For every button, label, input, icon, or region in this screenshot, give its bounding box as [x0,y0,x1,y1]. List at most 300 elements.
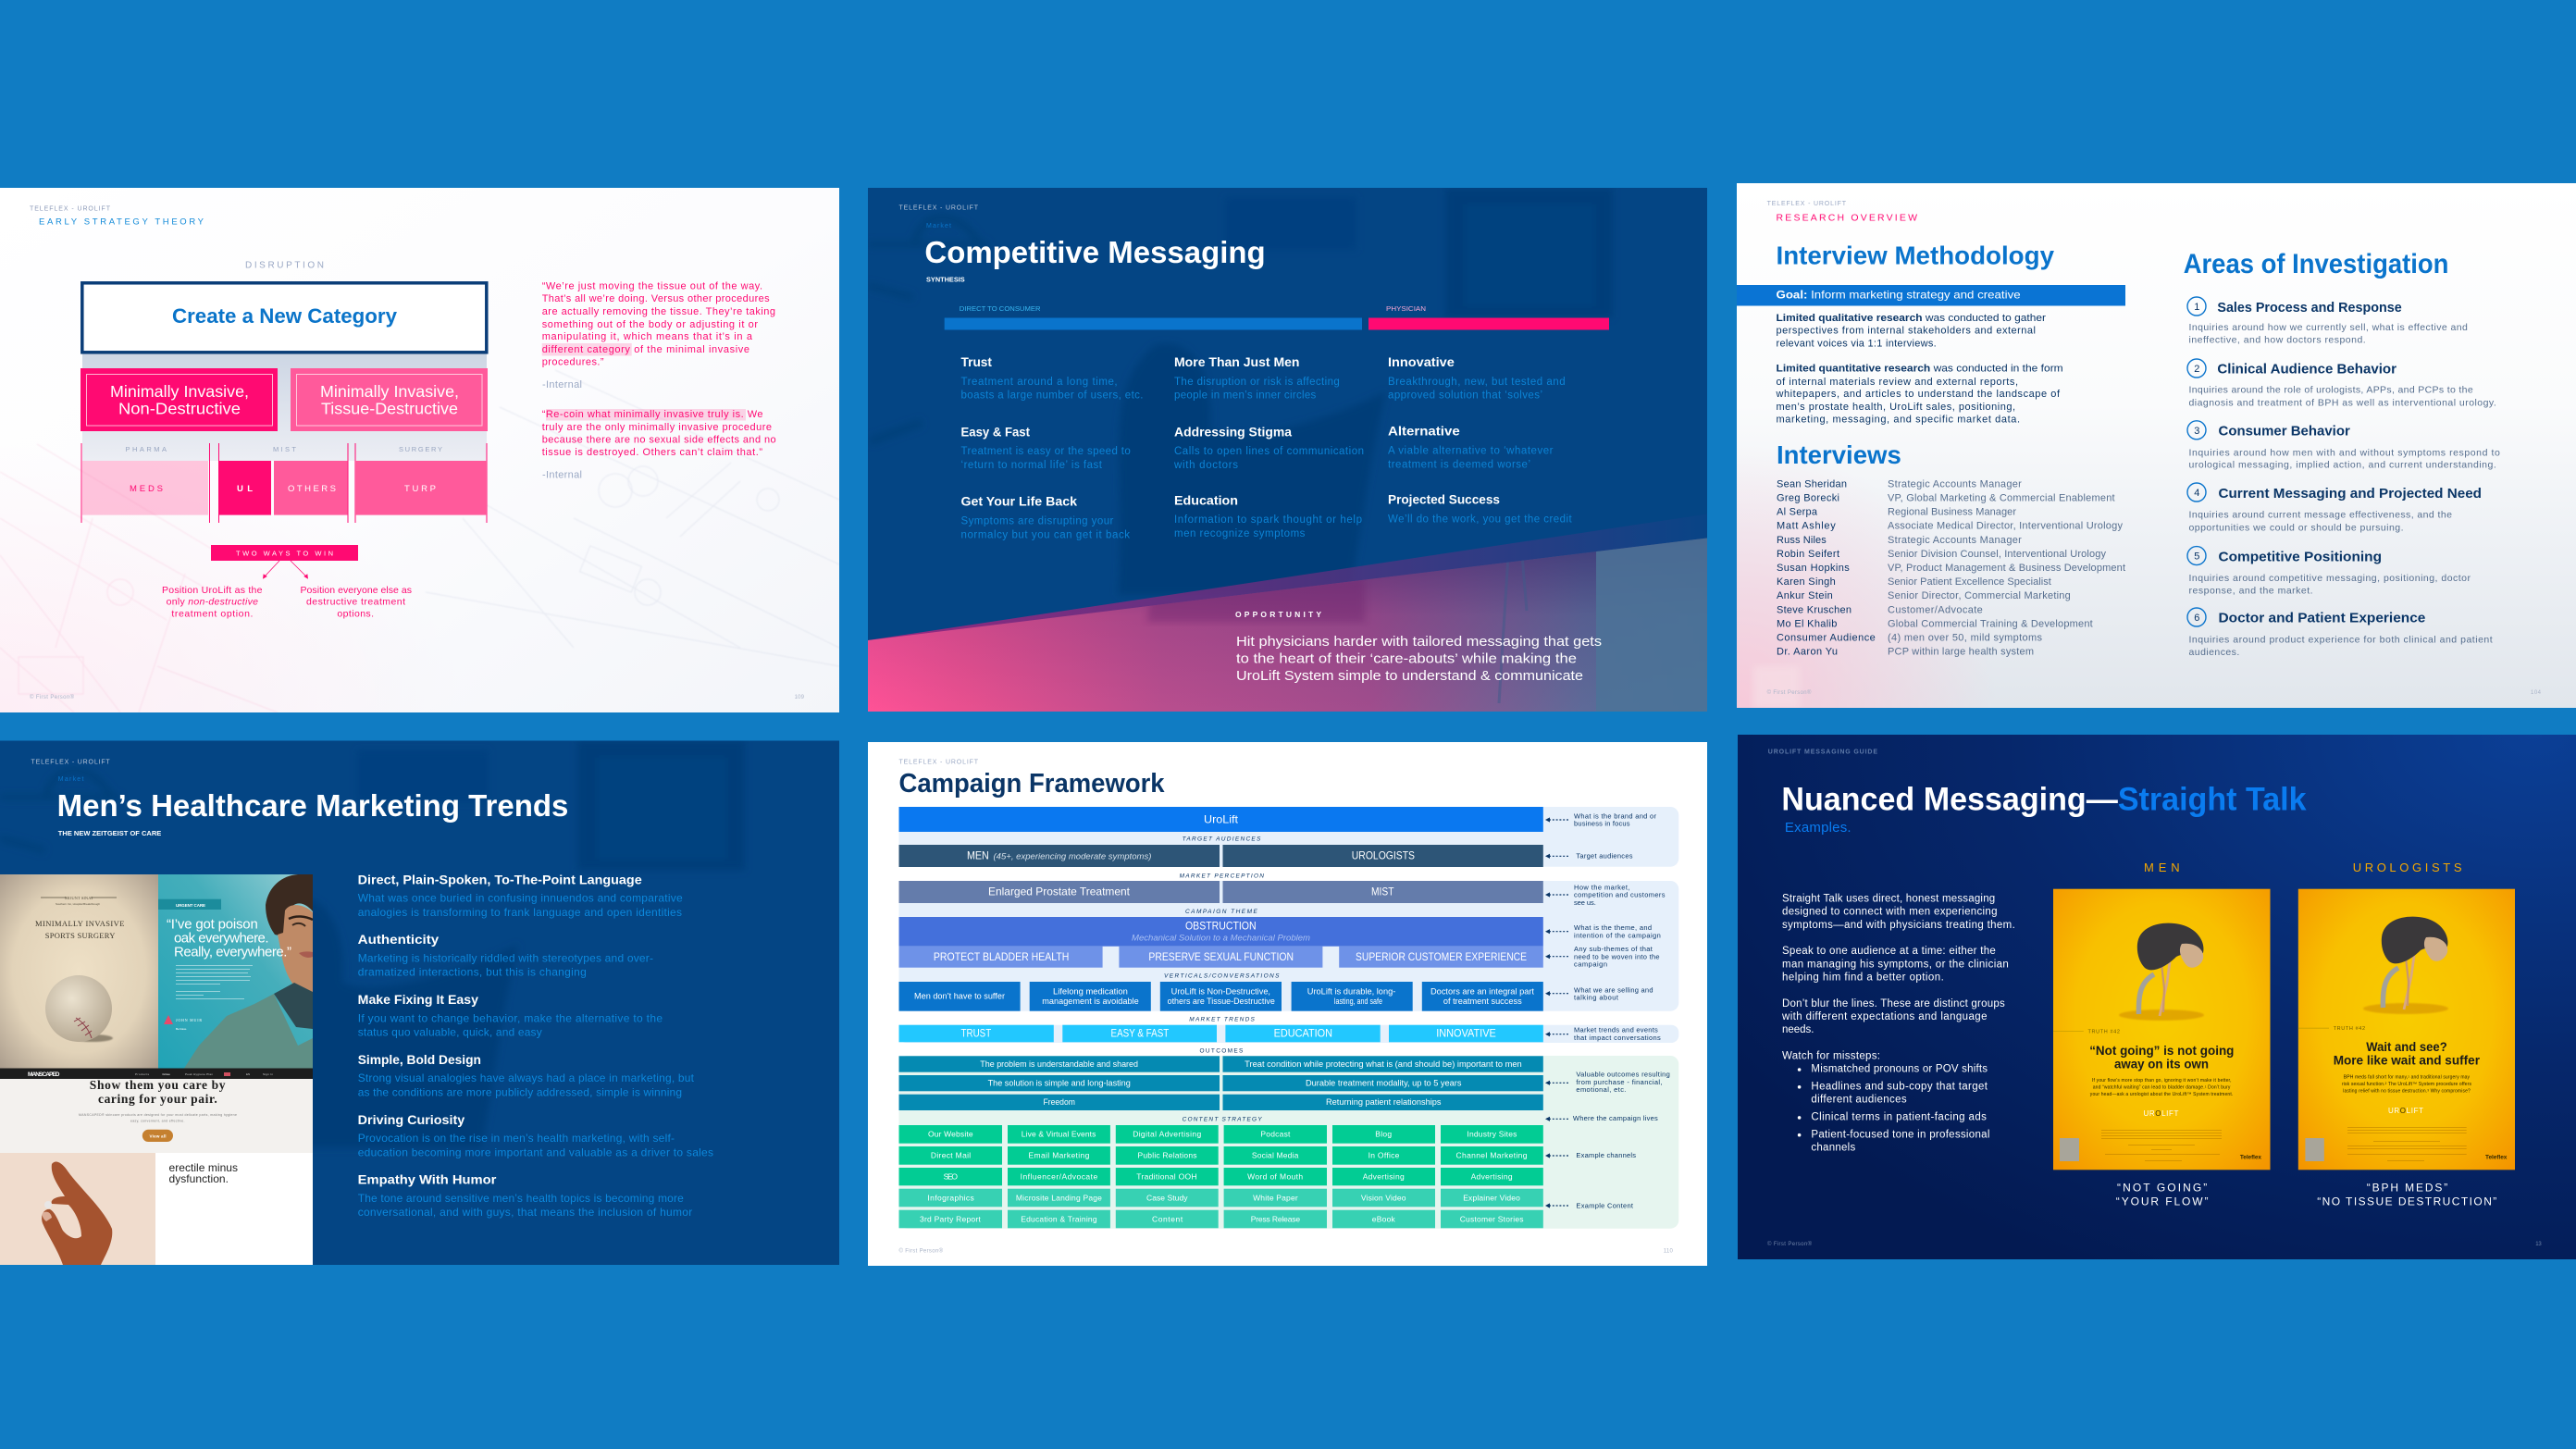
page number: 109 [795,695,805,700]
grid: example channels: Blog [1375,1130,1392,1139]
quote 1: different category of the minimal invasive [542,344,749,355]
column header: physician: PHYSICIAN [1386,304,1426,313]
item 3: urological messaging, implied action, and current understanding. [2189,460,2496,471]
list: missteps: Headlines and sub-copy that target [1811,1081,1988,1092]
background group: outcomes and content [899,1056,1678,1229]
ad: minimally invasive sports surgery [0,874,158,1068]
callout: opportunity [1235,610,1602,684]
item 5: Inquiries around competitive messaging, positioning, doctor [2189,573,2471,584]
row: obstruction theme: Mechanical Solution to a Mechanical Problem [1132,934,1310,944]
message: education: Information to spark thought or help [1174,514,1362,526]
grid: outcomes [899,1056,1543,1110]
annotation: brand in focus: What is the brand and or [1574,811,1656,820]
header: client: TELEFLEX - UROLIFT [1767,201,1847,207]
box: tissue-destructive [291,368,488,431]
message: trust: boasts a large number of users, etc. [960,390,1144,402]
list: missteps: different audiences [1811,1095,1907,1106]
caption: urologists [2317,1182,2496,1208]
row: market perception: MIST [1371,886,1394,898]
row: market perception: Enlarged Prostate Treatment [988,886,1131,898]
trend: direct language: What was once buried in confusing innuendos and comparative [358,892,683,905]
text: position urolift: Position UroLift as the [162,585,263,596]
row: audiences: UROLOGISTS [1352,849,1415,862]
grid: example content: Press Release [1251,1214,1300,1223]
poster: men [2053,889,2271,1170]
panel background [1738,735,2576,1259]
site: manscaped: Our Cause [162,1072,170,1076]
row: market trends: EDUCATION [1274,1027,1332,1040]
annotation: sub-themes [1545,945,1660,969]
item 4: Current Messaging and Projected Need [2219,486,2482,502]
text: introduction: man managing his symptoms, or the clinician [1782,959,2009,970]
poster: urologists: UROLIFT [2388,1107,2423,1115]
grid: example channels: Live & Virtual Events [1022,1130,1096,1139]
grid: example content: Microsite Landing Page [1016,1194,1102,1203]
item 2: 2 [2194,364,2199,375]
row: conversations: management is avoidable [1042,997,1139,1006]
item 4: opportunities we could or should be pursuing. [2189,522,2404,533]
table: interviewee roles: VP, Global Marketing & Commercial Enablement [1888,492,2115,503]
trend: empathy with humor: Empathy With Humor [358,1171,497,1186]
table: interviewee roles: Senior Patient Excellence Specialist [1888,576,2051,588]
ad: urgent care: Really, everywhere.” [174,944,291,960]
background group: market trends [899,1025,1678,1043]
grid: example channels: Advertising [1363,1172,1405,1182]
trend: driving curiosity: Driving Curiosity [358,1112,465,1127]
annotation: example content: Example Content [1576,1201,1634,1209]
label: market: Market [926,223,951,229]
header: section title: RESEARCH OVERVIEW [1777,213,1917,224]
row: urolift brand [899,807,1543,832]
diagram label: DISRUPTION [245,261,324,270]
text: quantitative research: Limited quantitative research was conducted in the form [1777,364,2063,375]
item 5: Competitive Positioning [2219,549,2382,564]
grid: example channels: Industry Sites [1467,1130,1517,1139]
panel: campaign framework [868,742,1707,1266]
item 2: diagnosis and treatment of BPH as well as interventional urology. [2189,397,2496,408]
message: more than just men: people in men’s inner circles [1174,390,1317,402]
header: guide: UROLIFT MESSAGING GUIDE [1768,749,1877,756]
column header: direct to consumer [945,304,1362,329]
site: manscaped: View all [150,1134,167,1138]
trend: make fixing it easy [358,992,663,1039]
annotation: market perception: see us. [1574,898,1596,907]
segment: meds [82,461,208,515]
poster: urologists: TRUTH #42 [2334,1026,2365,1032]
box: non-destructive [80,368,278,431]
ad: minimally invasive sports surgery: MOUNT SINAI [65,896,93,900]
message: projected success: Projected Success [1388,492,1500,506]
quote 2 [542,409,776,480]
footer: © First Person® [1767,689,1812,696]
footer: © First Person® [30,694,75,700]
grid: example channels: Direct Mail [931,1151,971,1160]
table: interviewee names: Karen Singh [1777,576,1836,588]
grid: outcomes: The problem is understandable and shared [980,1059,1138,1069]
title: Campaign Framework [899,769,1165,799]
trend: make fixing it easy: status quo valuable, quick, and easy [358,1026,542,1039]
goal bar: Goal: Inform marketing strategy and creative [1777,288,2021,301]
annotation: target audiences: Target audiences [1576,852,1633,861]
item 3: Consumer Behavior [2219,424,2350,439]
header: client: TELEFLEX - UROLIFT [899,205,979,212]
trend: authenticity: dramatized interactions, but this is changing [358,966,587,979]
item 4: Inquiries around current message effectiveness, and the [2189,510,2452,521]
poster: urologists: risk sexual function.² The UroLift™ System procedure offers [2342,1082,2472,1087]
message: innovative: approved solution that ‘solves’ [1388,390,1542,402]
panel background [0,188,839,712]
message: easy and fast: Easy & Fast [960,425,1030,439]
category labels: SURGERY [399,445,442,453]
list: missteps: channels [1811,1143,1855,1154]
poster: urologists: lasting relief with no tissue destruction.³ Why compromise? [2343,1088,2471,1094]
annotation: brand in focus: business in focus [1574,820,1630,828]
poster: urologists: More like wait and suffer [2334,1054,2481,1068]
table: interviewee names: Mo El Khalib [1777,618,1837,629]
message: easy and fast [960,425,1131,471]
annotation: theme: What is the theme, and [1574,923,1652,932]
header: client: TELEFLEX - UROLIFT [30,205,111,213]
row: conversations: Men don’t have to suffer [914,992,1005,1001]
grid: example content: Case Study [1146,1194,1188,1203]
annotation: outcomes: Valuable outcomes resulting [1576,1071,1670,1079]
row: market trends: INNOVATIVE [1436,1027,1496,1040]
message: easy and fast: ‘return to normal life’ is fast [960,460,1103,471]
annotation: selling [1545,985,1653,1001]
poster: men: TRUTH #42 [2087,1029,2120,1034]
grid: example content: eBook [1372,1214,1396,1223]
quote 1: something out of the body or adjusting it or [542,319,758,330]
poster: urologists: Wait and see? [2366,1040,2447,1054]
grid: example content: Content [1152,1214,1183,1223]
item 2 [2187,359,2496,408]
poster: urologists [2298,889,2515,1170]
text: quantitative research: marketing, messaging, and specific market data. [1777,415,2020,426]
annotation: sub-themes: need to be woven into the [1574,952,1660,960]
heading: interviews: Interviews [1777,440,1901,469]
text: introduction: Watch for missteps: [1782,1050,1880,1061]
message: projected success [1388,492,1572,525]
category labels [126,447,442,452]
site: manscaped: EN [246,1072,250,1076]
trend: authenticity: Authenticity [358,932,439,947]
table: interviewee roles: Global Commercial Training & Development [1888,618,2093,629]
poster: men: “Not going” is not going [2089,1044,2234,1058]
panel background [868,188,1707,712]
text: introduction: needs. [1782,1024,1814,1035]
grid: outcomes: The solution is simple and long-lasting [988,1079,1131,1088]
row: sub-themes: SUPERIOR CUSTOMER EXPERIENCE [1356,950,1527,963]
text: position urolift: treatment option. [171,609,253,620]
trend: direct language: analogies is transforming to frank language and open identities [358,906,682,919]
diagram: disruption [80,261,488,523]
message: alternative: Alternative [1388,424,1460,439]
grid: example channels: Word of Mouth [1247,1172,1303,1182]
annotation: market trends: that impact conversations [1574,1034,1661,1042]
annotation: example channels [1545,1151,1636,1159]
table: interviewee roles: Senior Director, Commercial Marketing [1888,590,2071,601]
message: more than just men: More Than Just Men [1174,355,1299,369]
quote 2: “Re-coin what minimally invasive truly is. We [542,409,762,420]
row: audiences: (45+, experiencing moderate symptoms) [994,852,1151,861]
header: section title: EARLY STRATEGY THEORY [39,217,204,227]
trend: simple bold design: as the conditions are more publicly addressed, simple is winning [358,1085,682,1098]
poster: men: Teleflex [2240,1155,2261,1161]
item 6: 6 [2194,613,2199,624]
text: quantitative research: whitepapers, and articles to understand the landscape of [1775,389,2061,400]
grid: example channels [899,1125,1543,1185]
message: get your life back: Symptoms are disrupting your [960,516,1114,527]
caption: urologists: “BPH MEDS” [2367,1182,2447,1195]
grid: example channels: Podcast [1260,1130,1291,1139]
table: interviewee roles: Strategic Accounts Manager [1888,478,2022,489]
ad: urgent care: oak everywhere. [174,931,268,947]
item 1: Inquiries around how we currently sell, what is effective and [2189,322,2468,333]
list: missteps: Mismatched pronouns or POV shifts [1811,1064,1988,1075]
table: interviewee names: Steve Kruschen [1777,604,1852,615]
table: interviewee roles: Strategic Accounts Manager [1888,535,2022,546]
ad: urgent care: Be brave. [176,1027,187,1031]
text: introduction: with different expectations and language [1781,1011,1988,1022]
segment: others [274,461,348,515]
caption: men: “NOT GOING” [2117,1182,2207,1195]
item 1 [2187,297,2468,346]
ad: urgent care [158,874,313,1068]
annotation: target audiences [1545,852,1633,861]
grid: example channels: Digital Advertising [1133,1130,1201,1139]
annotation: sub-themes: Any sub-themes of that [1574,945,1653,953]
page number: 13 [2535,1242,2542,1247]
opportunity wedge: dark band [868,514,1707,712]
footer: © First Person® [1767,1241,1813,1247]
quote 1: -Internal [542,379,582,390]
table: interviewee names: Al Serpa [1777,507,1818,518]
row: sub-themes: PROTECT BLADDER HEALTH [934,950,1069,963]
box: tissue-destructive: Tissue-Destructive [321,400,458,418]
text: introduction: designed to connect with men experiencing [1782,907,1997,918]
text: quantitative research: of internal materials review and external reports, [1777,377,2018,388]
item 1: ineffective, and how doctors respond. [2189,335,2366,346]
grid: example content [899,1189,1543,1228]
grid: example channels: SEO [944,1172,958,1182]
item 3: 3 [2194,426,2199,437]
text: introduction: Don’t blur the lines. These are distinct groups [1782,998,2005,1009]
row: sub-themes [899,947,1543,968]
message: alternative: treatment is deemed worse’ [1388,460,1530,471]
table: interviewee names: Sean Sheridan [1777,478,1847,489]
text: introduction: Straight Talk uses direct, honest messaging [1782,894,1995,905]
row: market trends [899,1025,1543,1042]
label: market trends: MARKET TRENDS [1189,1017,1256,1023]
grid: example content: 3rd Party Report [920,1214,981,1223]
annotation: market perception: How the market, [1574,883,1630,891]
opportunity wedge: gradient [868,539,1707,712]
panel: research overview [1737,183,2576,708]
text: qualitative research: perspectives from internal stakeholders and external [1777,326,2036,337]
trend: make fixing it easy: If you want to change behavior, make the alternative to the [358,1012,663,1025]
message: easy and fast: Treatment is easy or the speed to [960,446,1131,457]
table: interviewee names: Matt Ashley [1777,521,1836,532]
column header: direct to consumer: DIRECT TO CONSUMER [960,304,1041,313]
ad: urgent care: “I’ve got poison [167,917,258,933]
row: market perception [899,881,1543,903]
quote 1: “We’re just moving the tissue out of the way. [542,281,762,292]
column label: urologists: UROLOGISTS [2353,861,2462,874]
table: interviewee names: Ankur Stein [1777,590,1833,601]
caption: men: “YOUR FLOW” [2116,1195,2208,1208]
quote 2: tissue is destroyed. Others can’t claim that.” [542,447,762,458]
grid: outcomes: Freedom [1044,1097,1075,1107]
message: addressing stigma: Addressing Stigma [1174,425,1292,439]
message: trust [960,355,1144,402]
trend: authenticity: Marketing is historically riddled with stereotypes and over- [358,951,653,964]
message: trust: Trust [960,355,993,369]
grid: example content: Vision Video [1361,1194,1406,1203]
text: qualitative research [1777,313,2046,350]
message: innovative: Innovative [1388,355,1455,369]
list: missteps: Clinical terms in patient-facing ads [1811,1112,1987,1123]
title: Men’s Healthcare Marketing Trends [57,788,568,823]
grid: example content: Customer Stories [1460,1214,1523,1223]
segment: ul: UL [237,484,253,494]
category labels: MIST [273,445,296,453]
table: interviewee names: Russ Niles [1777,535,1827,546]
grid: example channels: Social Media [1252,1151,1299,1160]
trend: empathy with humor: The tone around sensitive men’s health topics is becoming more [358,1192,684,1205]
annotation: example channels: Example channels [1576,1151,1636,1159]
row: conversations: of treatment success [1443,997,1522,1006]
connecting band [82,353,487,461]
item 1: 1 [2194,302,2199,313]
site: manscaped: easy, convenient, and effective. [130,1120,185,1123]
row: conversations: Lifelong medication [1053,987,1128,997]
label: verticals: VERTICALS/CONVERSATIONS [1164,973,1280,980]
label: market perception: MARKET PERCEPTION [1180,873,1264,879]
goal bar [1737,285,2125,305]
segment: turp [355,461,487,515]
message: projected success: We’ll do the work, you get the credit [1388,514,1572,525]
poster: men: away on its own [2114,1057,2209,1071]
ad: erectile minus dysfunction [0,1153,313,1265]
text: position urolift [162,585,263,620]
grid: outcomes: Treat condition while protecting what is (and should be) important to men [1245,1059,1522,1069]
ad: minimally invasive sports surgery: Southern Inn, Hospital Breakthrough [56,902,100,906]
subtitle: SYNTHESIS [926,275,965,283]
item 2: Inquiries around the role of urologists, APPs, and PCPs to the [2189,385,2473,396]
heading: areas of investigation: Areas of Investigation [2184,249,2448,279]
item 5 [2187,547,2471,597]
text: position urolift: only non-destructive [167,596,258,607]
segment: meds: MEDS [130,484,163,494]
panel background [0,740,839,1265]
message: more than just men: The disruption or risk is affecting [1174,377,1340,388]
annotation: example content [1545,1201,1634,1209]
box: create a new category: Create a New Category [172,304,398,328]
message: trust: Treatment around a long time, [960,377,1118,388]
quote 1: procedures.” [542,357,604,368]
trend: empathy with humor [358,1171,692,1219]
table: interviewee names: Consumer Audience [1777,633,1876,644]
item 6 [2187,608,2493,658]
label: outcomes: OUTCOMES [1199,1047,1244,1054]
site: manscaped: MANSCAPED [28,1071,60,1078]
column label: men: MEN [2144,861,2180,874]
trend: direct language [358,872,683,919]
grid: example channels: Our Website [928,1130,973,1139]
message: get your life back: Get Your Life Back [960,495,1078,509]
item 1: Sales Process and Response [2217,300,2402,316]
message: addressing stigma: Calls to open lines of communication [1174,446,1364,457]
caption: men [2116,1182,2208,1208]
image collage [0,874,313,1265]
poster: urologists: BPH meds fall short for many,¹ and traditional surgery may [2344,1074,2471,1080]
box: non-destructive: Minimally Invasive, [110,382,249,401]
callout: two ways to win: TWO WAYS TO WIN [236,550,333,557]
text: position everyone else [300,585,412,620]
site: manscaped: Show them you care by [90,1078,226,1092]
segment: ul [218,461,271,515]
item 5: response, and the market. [2189,586,2313,597]
grid: example content: Education & Training [1021,1214,1097,1223]
callout: opportunity: OPPORTUNITY [1235,610,1321,619]
heading: interview methodology: Interview Methodology [1777,241,2054,269]
row: audiences: MEN [967,849,989,862]
grid: outcomes: Returning patient relationships [1326,1097,1442,1107]
column header: physician [1368,304,1609,329]
annotation: outcomes: emotional, etc. [1576,1085,1626,1094]
table: interviewee names: Robin Seifert [1777,549,1839,560]
trend: authenticity [358,932,653,979]
annotation: market trends: Market trends and events [1574,1026,1658,1034]
message: education: men recognize symptoms [1174,528,1306,539]
header: client: TELEFLEX - UROLIFT [899,760,979,766]
annotation: campaign lives: Where the campaign lives [1573,1114,1658,1122]
item 6: Inquiries around product experience for both clinical and patient [2189,634,2493,645]
table: interviewee names: Susan Hopkins [1777,563,1850,574]
segment: others: OTHERS [288,484,336,494]
box: create a new category [82,283,487,353]
text: qualitative research: Limited qualitative research was conducted to gather [1777,313,2046,324]
item 6: audiences. [2189,647,2239,658]
site: manscaped: MANSCAPED® skincare products are designed for your most delicate parts, making hygiene [79,1113,237,1117]
annotation: selling: What we are selling and [1574,985,1653,994]
item 3 [2187,421,2500,471]
trend: simple bold design [358,1052,695,1098]
text: introduction: symptoms—and with physicians treating them. [1782,920,2015,931]
text: quantitative research: men’s prostate health, UroLift sales, positioning, [1777,402,2015,413]
annotation: theme [1545,923,1661,939]
row: conversations: UroLift is durable, long- [1307,987,1395,997]
message: get your life back: normalcy but you can get it back [960,529,1130,540]
poster: urologists: Teleflex [2485,1155,2508,1161]
row: sub-themes: PRESERVE SEXUAL FUNCTION [1148,950,1294,963]
message: more than just men [1174,355,1340,402]
background group: perception to conversations [899,881,1678,1011]
panel: competitive messaging [867,188,1707,712]
subtitle: Examples. [1785,820,1852,836]
quote 1 [542,281,775,390]
list: missteps: Patient-focused tone in professional [1811,1129,1989,1140]
item 3: Inquiries around how men with and without symptoms respond to [2189,447,2500,458]
annotation: market perception [1545,883,1666,907]
subtitle: THE NEW ZEITGEIST OF CARE [58,829,161,837]
panel: men's healthcare marketing trends [0,740,839,1265]
annotation: market trends [1545,1026,1661,1042]
text: position everyone else: Position everyone else as [300,585,412,596]
table: interviewee roles: VP, Product Management & Business Development [1888,563,2125,574]
annotation: outcomes [1545,1071,1670,1094]
row: audiences [899,845,1543,867]
